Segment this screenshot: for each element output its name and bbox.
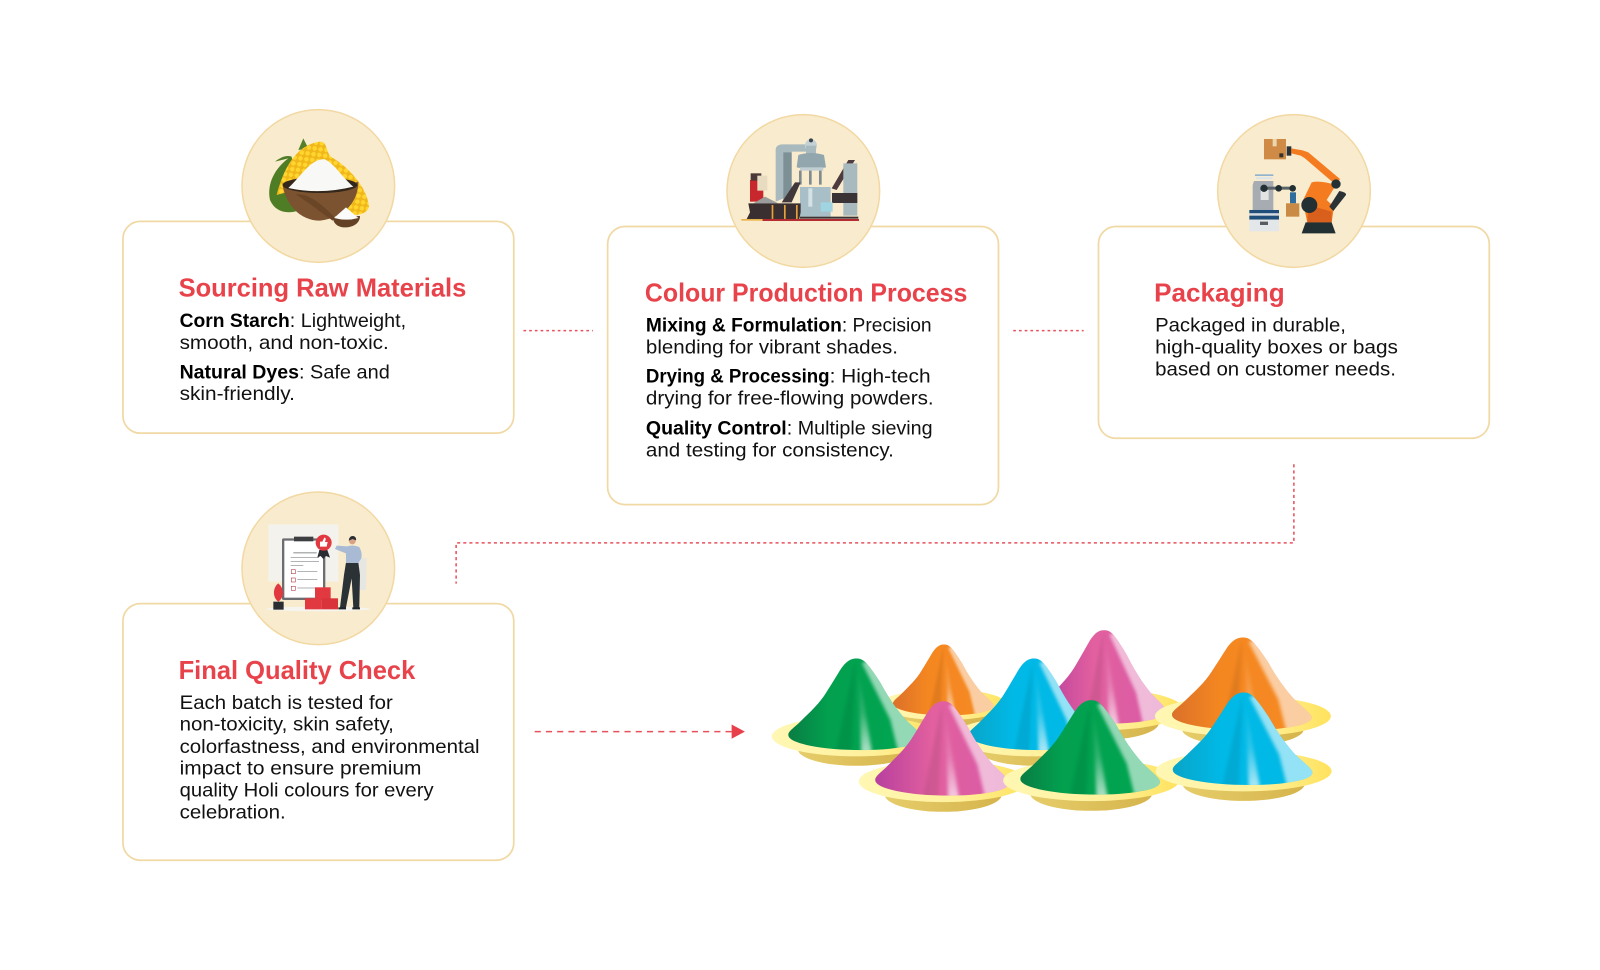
body text: skin-friendly. <box>180 383 295 405</box>
connector: packaging to final quality check <box>456 464 1294 584</box>
infographic canvas <box>122 108 1490 862</box>
body text: quality Holi colours for every <box>180 779 434 801</box>
body text: drying for free-flowing powders. <box>646 388 934 410</box>
card box <box>123 221 514 433</box>
body text: Drying & Processing <box>646 366 830 388</box>
arrow: final check to finished colours <box>535 724 745 739</box>
body text: : High-tech <box>830 366 931 388</box>
panel: sourcing raw materials <box>123 110 514 433</box>
body text <box>1155 315 1398 381</box>
illustration: plates of Holi colour powder <box>772 628 1332 812</box>
body text: high-quality boxes or bags <box>1155 337 1398 359</box>
body text: Corn Starch <box>180 310 290 332</box>
card box <box>608 227 998 505</box>
heading: Packaging <box>1154 280 1285 308</box>
body text: smooth, and non-toxic. <box>180 332 389 354</box>
body text: colorfastness, and environmental <box>180 736 480 758</box>
heading: Sourcing Raw Materials <box>179 274 466 302</box>
body text: non-toxicity, skin safety, <box>180 714 394 736</box>
icon: quality inspector with checklist <box>242 492 395 645</box>
panel: colour production process <box>608 115 998 505</box>
panel: packaging <box>1098 115 1489 438</box>
body text: Mixing & Formulation <box>646 315 842 337</box>
body text: based on customer needs. <box>1155 359 1396 381</box>
body text: : Safe and <box>299 362 390 384</box>
body text: and testing for consistency. <box>646 440 894 462</box>
body text: Natural Dyes <box>180 362 299 384</box>
body text: : Multiple sieving <box>787 418 933 440</box>
body text <box>180 692 480 823</box>
panel: final quality check <box>123 492 514 860</box>
body text <box>180 310 406 405</box>
heading: Final Quality Check <box>179 657 416 685</box>
body text: : Precision <box>842 315 932 337</box>
icon: packaging robot <box>1218 115 1370 267</box>
body text: impact to ensure premium <box>180 757 421 779</box>
body text: Each batch is tested for <box>180 692 393 714</box>
connector: production to packaging <box>1013 330 1084 332</box>
heading: Colour Production Process <box>645 280 967 308</box>
icon: mixing machine <box>727 115 880 267</box>
body text: Packaged in durable, <box>1155 315 1346 337</box>
body text: : Lightweight, <box>290 310 406 332</box>
body text: blending for vibrant shades. <box>646 337 898 359</box>
icon: corn and starch bowl <box>242 110 395 262</box>
body text: celebration. <box>180 801 286 823</box>
connector: sourcing to production <box>523 330 593 332</box>
card box <box>1098 227 1489 438</box>
body text: Quality Control <box>646 418 787 440</box>
card box <box>123 604 514 860</box>
body text <box>646 315 934 462</box>
